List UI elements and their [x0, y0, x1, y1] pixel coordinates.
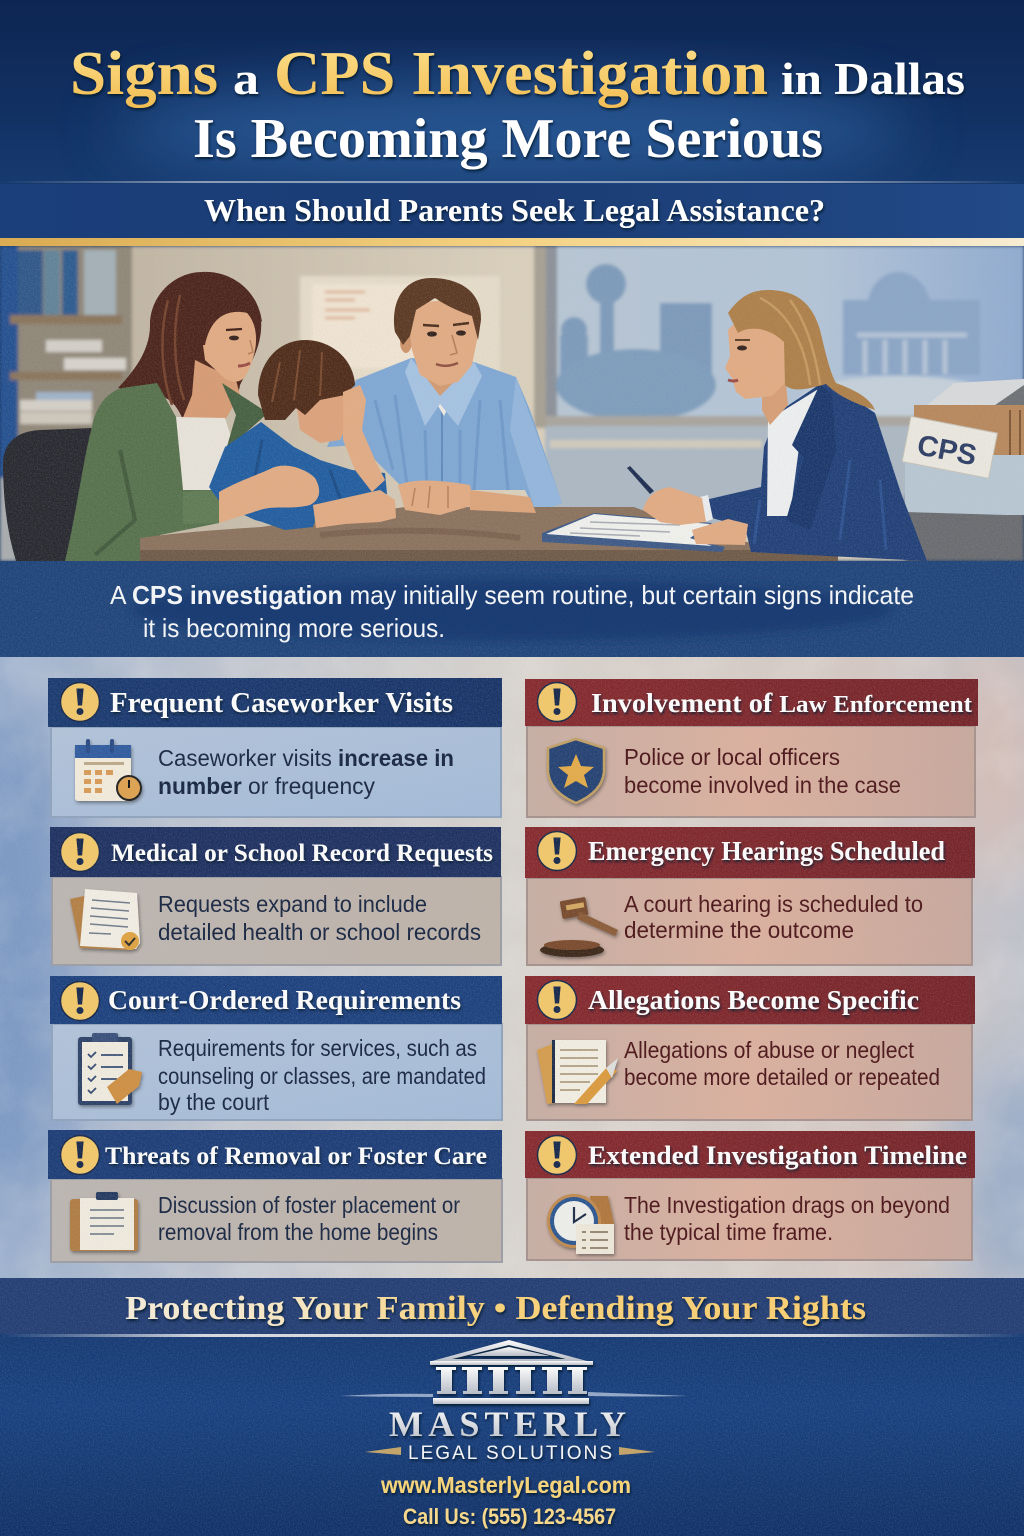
binder	[542, 513, 725, 552]
child's forearm	[262, 506, 315, 530]
man: father	[327, 278, 562, 513]
footer: Call Us: (555) 123-4567	[403, 1504, 616, 1529]
panel: Court-Ordered Requirements: Court-Ordered Requirements	[108, 985, 461, 1015]
icon: police shield	[548, 739, 604, 803]
illustration: family meeting with CPS caseworker	[0, 246, 1024, 561]
panel: Court-Ordered Requirements	[50, 976, 502, 1120]
panel: Court-Ordered Requirements: by the court	[158, 1089, 270, 1115]
panel: Emergency Hearings Scheduled: Emergency Hearings Scheduled	[588, 836, 945, 866]
panel: Involvement of Law Enforcement: become involved in the case	[624, 772, 901, 798]
mother's hand	[219, 466, 319, 523]
contact: www.MasterlyLegal.com	[380, 1472, 631, 1498]
icon: gavel	[540, 897, 618, 957]
panel: Allegations Become Specific: become more detailed or repeated	[624, 1064, 940, 1090]
intro band	[0, 561, 1024, 657]
panel: Medical or School Record Requests: Requests expand to include	[158, 891, 427, 917]
panel: Involvement of Law Enforcement	[525, 679, 978, 817]
icon: clipboard checklist	[78, 1033, 142, 1105]
footer	[0, 1278, 1024, 1536]
panel: Allegations Become Specific: Allegations Become Specific	[588, 985, 919, 1015]
panel: Allegations Become Specific	[525, 976, 975, 1120]
card header	[525, 827, 975, 878]
CPS file box	[902, 379, 1024, 515]
panel: Threats of Removal or Foster Care: Discussion of foster placement or	[158, 1192, 460, 1218]
panel: Threats of Removal or Foster Care: Threats of Removal or Foster Care	[105, 1143, 487, 1170]
woman: mother	[65, 272, 268, 561]
card header	[525, 1131, 975, 1178]
icon: document and quill	[537, 1040, 618, 1104]
icon: documents with check	[70, 889, 140, 950]
panel: Allegations Become Specific: Allegations of abuse or neglect	[624, 1037, 915, 1063]
card header	[48, 1130, 502, 1179]
card header	[48, 678, 502, 727]
panel: Emergency Hearings Scheduled	[525, 827, 975, 965]
intro text: A CPS investigation may initially seem routine, but certain signs indicate	[110, 580, 914, 610]
wordmark: MASTERLY	[389, 1404, 626, 1444]
panel: Medical or School Record Requests	[50, 827, 501, 965]
panel: Court-Ordered Requirements: counseling or classes, are mandated	[158, 1063, 486, 1089]
subtitle: When Should Parents Seek Legal Assistance?	[204, 192, 825, 228]
panel: Frequent Caseworker Visits: number or frequency	[158, 773, 375, 799]
panel: Extended Investigation Timeline: Extended Investigation Timeline	[588, 1141, 967, 1170]
panel: Extended Investigation Timeline: The Investigation drags on beyond	[624, 1192, 950, 1218]
intro text	[110, 580, 914, 643]
tagline: Protecting Your Family • Defending Your Rights	[125, 1290, 866, 1327]
card header	[50, 976, 502, 1024]
room background	[0, 246, 1024, 561]
panel: Involvement of Law Enforcement: Police or local officers	[624, 744, 840, 770]
footer: LEGAL SOLUTIONS	[408, 1443, 612, 1464]
CPS file box: CPS	[915, 429, 979, 472]
icon: calendar with clock	[75, 741, 141, 801]
chair	[3, 428, 92, 561]
father's hands	[398, 480, 474, 515]
title: Signs	[70, 40, 218, 108]
logo: temple	[430, 1340, 593, 1404]
panel: Frequent Caseworker Visits: Frequent Caseworker Visits	[110, 688, 453, 719]
panel: Court-Ordered Requirements: Requirements for services, such as	[158, 1035, 477, 1061]
panel: Medical or School Record Requests: Medical or School Record Requests	[111, 840, 493, 867]
title: CPS Investigation	[274, 40, 768, 108]
panel: Extended Investigation Timeline	[525, 1131, 975, 1260]
card header	[525, 976, 975, 1024]
card header	[525, 679, 978, 726]
panel: Frequent Caseworker Visits	[48, 678, 502, 817]
panel: Threats of Removal or Foster Care: removal from the home begins	[158, 1219, 438, 1245]
title: in Dallas	[781, 53, 965, 104]
title	[70, 40, 965, 170]
panel: Emergency Hearings Scheduled: determine the outcome	[624, 917, 854, 943]
panel: Extended Investigation Timeline: the typical time frame.	[624, 1219, 833, 1245]
table with arms and binder	[140, 466, 838, 561]
panel: Threats of Removal or Foster Care	[48, 1130, 502, 1262]
icon: clock with checklist	[547, 1194, 614, 1254]
header banner	[0, 0, 1024, 246]
card header	[50, 827, 501, 877]
panel: Medical or School Record Requests: detailed health or school records	[158, 919, 481, 945]
title: Is Becoming More Serious	[193, 108, 823, 170]
panel: Emergency Hearings Scheduled: A court hearing is scheduled to	[624, 891, 923, 917]
intro text: it is becoming more serious.	[143, 613, 445, 643]
title: a	[233, 53, 259, 104]
texture overlay on cards	[0, 657, 1024, 1278]
icon: foster file	[70, 1192, 138, 1251]
cards background	[0, 640, 1024, 1300]
panel: Involvement of Law Enforcement: Involvement of Law Enforcement	[591, 688, 972, 718]
panel: Frequent Caseworker Visits: Caseworker visits increase in	[158, 745, 454, 771]
woman: caseworker	[627, 290, 927, 561]
child	[209, 340, 387, 528]
